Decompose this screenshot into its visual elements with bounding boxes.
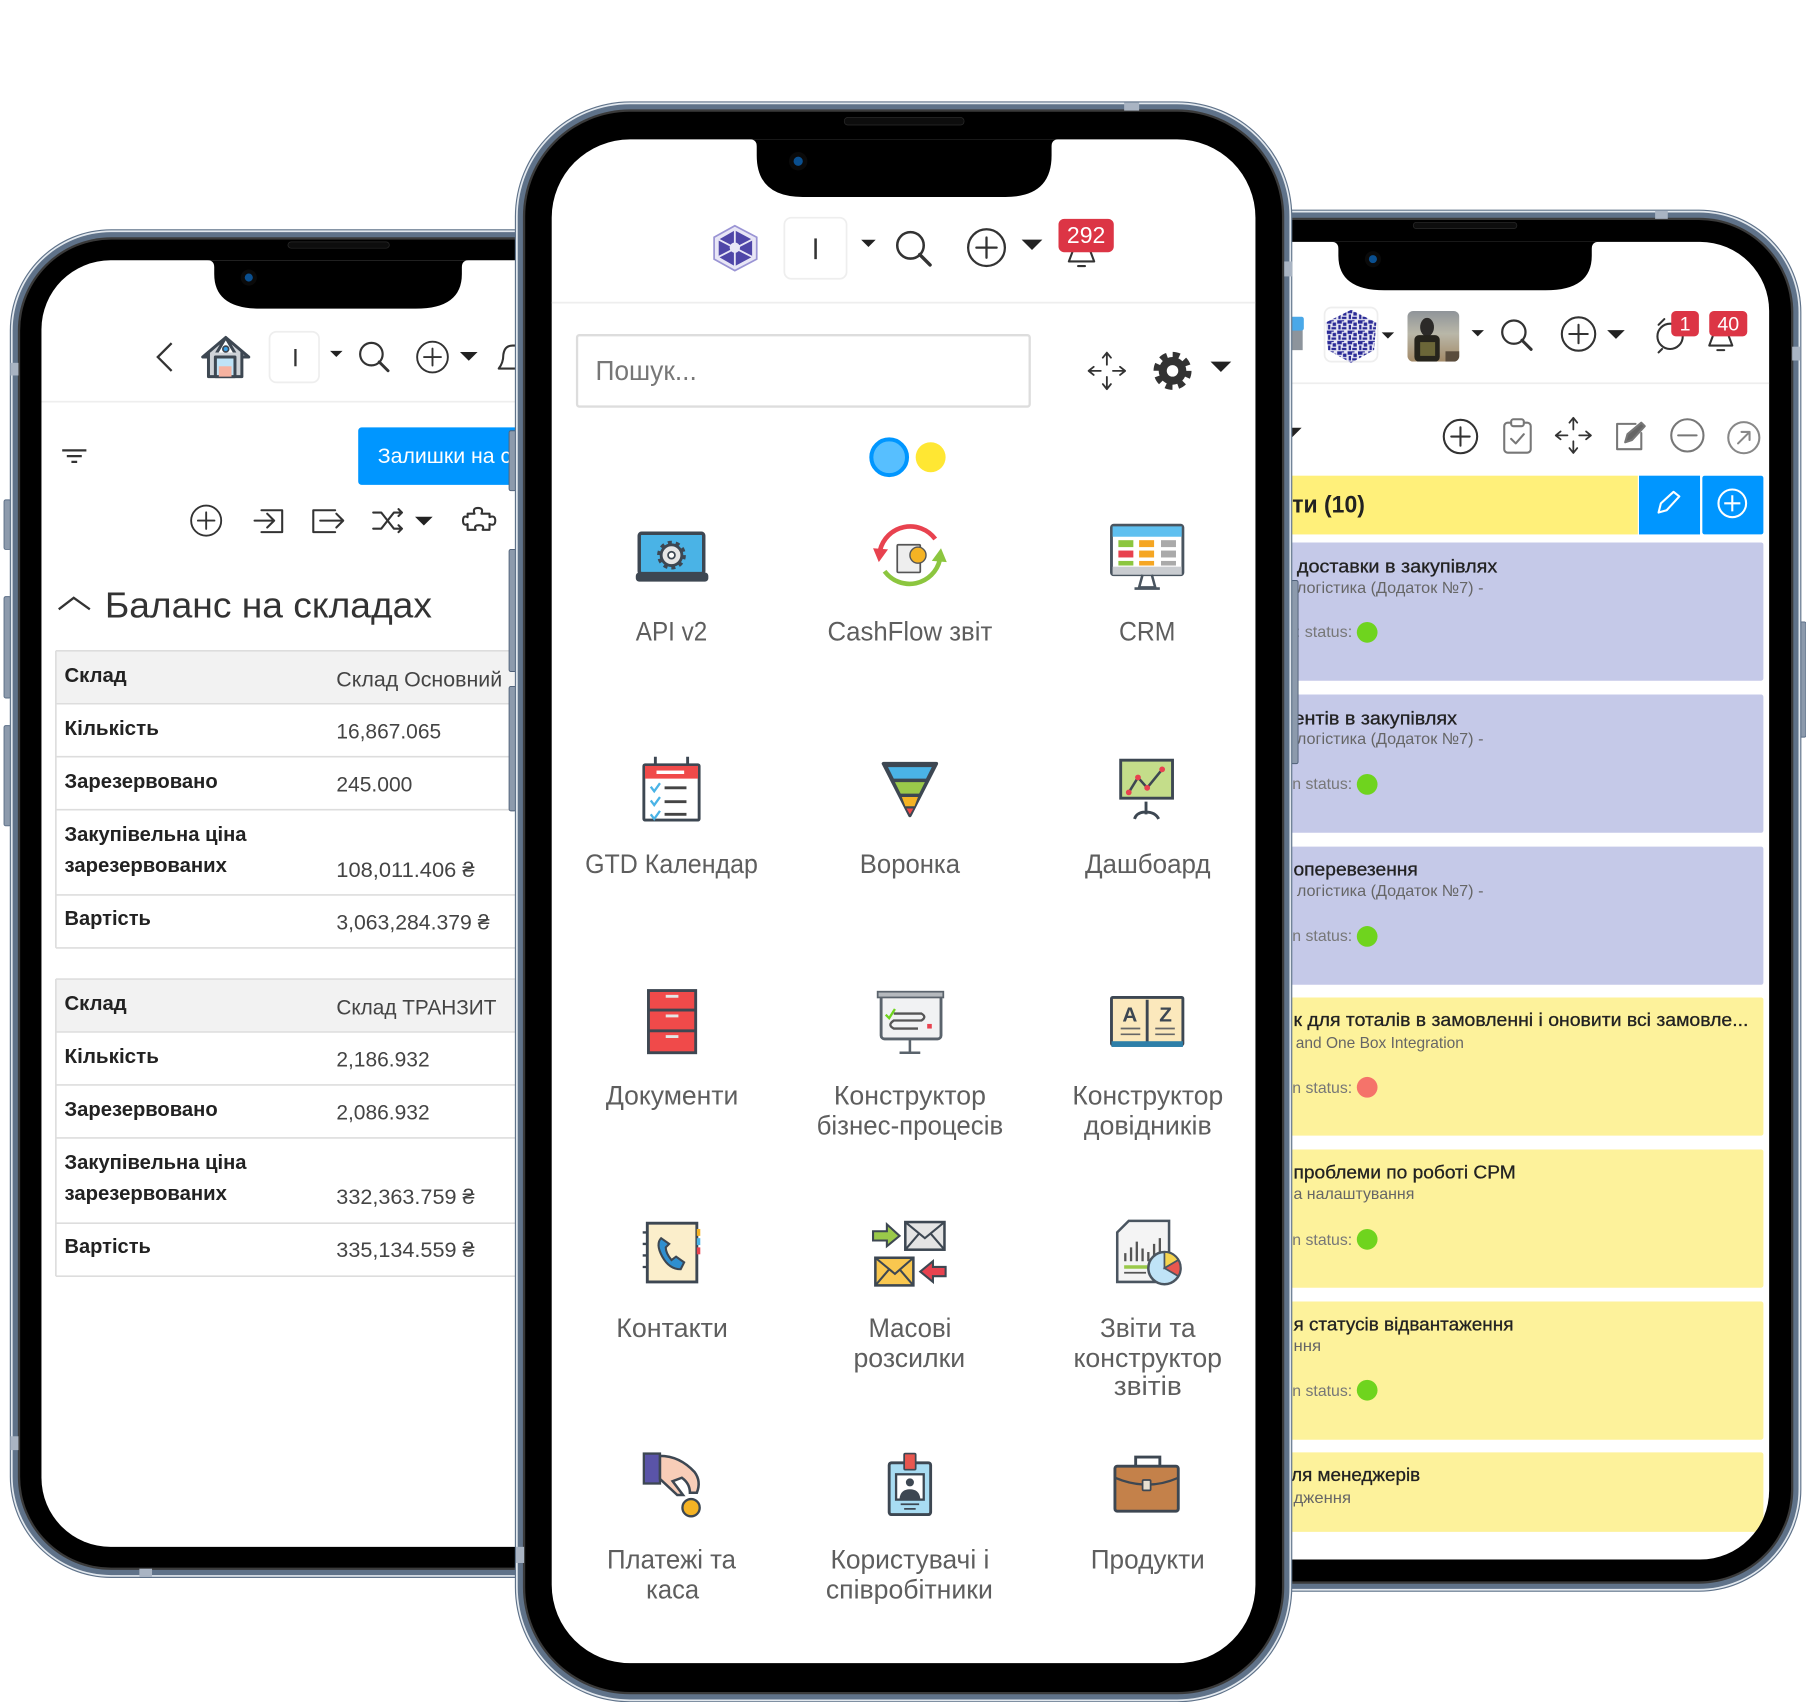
card: shipment statuses: [1267, 1302, 1763, 1440]
button: stock balance: [358, 427, 515, 485]
tile: users and employees: співробітники: [826, 1575, 993, 1605]
middle phone notch: [750, 117, 1058, 197]
icon: open: [1728, 422, 1759, 453]
tile: users and employees: [826, 1454, 993, 1605]
icon: hand and coin: [644, 1454, 700, 1516]
tile: mass mailing: Масові: [868, 1313, 951, 1343]
badge: notifications: 40: [1717, 314, 1739, 336]
icon: id badge: [889, 1454, 931, 1515]
icon: caret: [1211, 362, 1231, 372]
pagination dot active: [871, 439, 907, 475]
icon: laptop: [636, 533, 708, 582]
table: main warehouse: Закупівельна ціна: [64, 823, 247, 846]
icon: puzzle: [463, 508, 495, 530]
table: transit warehouse: 335,134.559 ₴: [336, 1238, 475, 1262]
card: transportation: n status:: [1292, 927, 1352, 945]
icon: drawers: [648, 991, 696, 1053]
icon: search: [897, 232, 930, 265]
button: edit column: [1639, 476, 1700, 534]
left phone side buttons: [4, 500, 11, 826]
badge: alarms: [1671, 311, 1699, 336]
icon: alarm: [1657, 319, 1683, 352]
table: transit warehouse: 332,363.759 ₴: [336, 1185, 475, 1209]
middle phone side buttons: [509, 431, 1298, 811]
card: CPM issues: n status:: [1292, 1231, 1352, 1249]
icon: briefcase: [1115, 1457, 1178, 1511]
icon: move: [1556, 418, 1591, 453]
tile: payments: Платежі та: [607, 1545, 736, 1575]
icon: add: [968, 229, 1005, 266]
tile: CashFlow report: [828, 526, 992, 646]
tile: reports: [1073, 1221, 1222, 1401]
table: transit warehouse: 2,186.932: [336, 1048, 430, 1072]
icon: caret: [460, 352, 478, 361]
tile: GTD calendar: GTD Календар: [585, 849, 758, 879]
table: transit warehouse: Закупівельна ціна: [64, 1151, 247, 1174]
table: transit warehouse: Вартість: [64, 1235, 151, 1258]
table: transit warehouse: Зарезервовано: [64, 1098, 218, 1121]
button: stock balance: Залишки на с: [378, 444, 512, 468]
card: delivery in purchases: [1267, 542, 1763, 681]
tile: documents: [606, 991, 738, 1111]
pagination dot: [916, 442, 946, 472]
icon: add: [1444, 420, 1477, 453]
icon: caret: [1292, 428, 1302, 437]
icon: caret: [1472, 330, 1484, 336]
right phone frame: [979, 210, 1801, 1592]
tile: products: Продукти: [1091, 1545, 1205, 1575]
icon: calendar: [644, 757, 699, 820]
tile: payments: каса: [646, 1575, 699, 1605]
tile: business process builder: бізнес-процесів: [817, 1111, 1003, 1141]
right header divider: [1292, 382, 1770, 384]
card: managers: [1267, 1452, 1763, 1532]
tile: reports: конструктор: [1073, 1343, 1222, 1373]
card: totals in orders: n status:: [1292, 1079, 1352, 1097]
avatar: user photo: [1407, 311, 1459, 362]
card: clients in purchases: [1267, 695, 1763, 833]
card: CPM issues: [1267, 1149, 1763, 1288]
table: transit warehouse: 2,086.932: [336, 1101, 430, 1125]
tile: contacts: [616, 1223, 728, 1343]
table: transit warehouse: Склад ТРАНЗИТ: [336, 996, 496, 1020]
tile: directories builder: Конструктор: [1072, 1081, 1223, 1111]
table: main warehouse: зарезервованих: [64, 854, 227, 877]
table: main warehouse: Зарезервовано: [64, 770, 218, 793]
card: delivery in purchases: логістика (Додаток №7) -: [1297, 579, 1483, 597]
card: clients in purchases: n status:: [1292, 775, 1352, 793]
tile: business process builder: [817, 992, 1003, 1141]
icon: dashboard: [1121, 760, 1173, 819]
icon: back chevron: [158, 343, 172, 371]
tile: API v2: API v2: [636, 616, 707, 646]
left header divider: [42, 401, 515, 402]
card: delivery in purchases: : status:: [1296, 623, 1352, 641]
left phone frame: [10, 229, 848, 1578]
tile: dashboard: Дашбоард: [1085, 849, 1211, 879]
tile: reports: Звіти та: [1100, 1313, 1196, 1343]
phone: app launcher: [509, 101, 1298, 1702]
phone: warehouse balance: [4, 229, 515, 1578]
tile: directories builder: довідників: [1084, 1111, 1212, 1141]
table: main warehouse: 16,867.065: [336, 719, 441, 743]
icon: move: [1089, 353, 1125, 389]
card: totals in orders: к для тоталів в замовленні і оновити всі замовле...: [1293, 1009, 1748, 1030]
table: transit warehouse: Склад: [64, 992, 127, 1015]
tile: CashFlow report: CashFlow звіт: [828, 616, 992, 646]
card: managers: дження: [1293, 1489, 1351, 1507]
card: delivery in purchases: доставки в закупівлях: [1297, 555, 1497, 576]
icon: filter: [62, 450, 86, 462]
tile: GTD calendar: [585, 757, 758, 879]
icon: bell: [498, 344, 515, 370]
middle input box: [784, 218, 847, 279]
icon: process board: [878, 992, 943, 1053]
icon: exit: [313, 510, 343, 532]
table: main warehouse: 3,063,284.379 ₴: [336, 910, 490, 934]
table: main warehouse: Кількість: [64, 717, 159, 740]
card: managers: ля менеджерів: [1291, 1464, 1420, 1485]
middle phone antenna bands: [516, 103, 1292, 1563]
table: main warehouse: 245.000: [336, 772, 412, 796]
middle phone screen content: [552, 218, 1255, 1605]
column header: [1267, 476, 1763, 534]
icon: edit: [1617, 423, 1645, 449]
table: transit warehouse: Кількість: [64, 1045, 159, 1068]
table: transit warehouse: [56, 979, 517, 1276]
table: main warehouse: [56, 651, 517, 948]
table: transit warehouse: зарезервованих: [64, 1182, 227, 1205]
icon: add: [417, 342, 448, 372]
card: CPM issues: а налаштування: [1293, 1185, 1414, 1203]
icon: caret: [330, 351, 343, 357]
card: CPM issues: проблеми по роботі СРМ: [1293, 1161, 1516, 1182]
search field: Пошук...: [595, 355, 697, 386]
right phone side button: [1800, 622, 1806, 737]
column header: ти (10): [1292, 492, 1365, 519]
left input box: [270, 332, 319, 382]
tile: CRM: CRM: [1119, 616, 1175, 646]
icon: add: [191, 506, 221, 536]
heading: Баланс на складах: [105, 585, 432, 625]
tile: mass mailing: розсилки: [853, 1343, 965, 1373]
table: main warehouse: 108,011.406 ₴: [336, 858, 475, 882]
badge: alarms: 1: [1680, 314, 1691, 336]
button: add card: [1702, 476, 1763, 534]
left phone antenna bands: [10, 363, 152, 1577]
icon: search: [360, 343, 388, 371]
phone: kanban board: [1292, 210, 1806, 1592]
tile: payments: [607, 1454, 736, 1605]
card: transportation: логістика (Додаток №7) -: [1297, 882, 1483, 900]
icon: add: [1562, 317, 1595, 351]
card: transportation: [1267, 847, 1763, 985]
tile: API v2: [636, 533, 708, 646]
right phone screen content: [1267, 308, 1769, 1532]
icon: caret: [415, 517, 433, 526]
card: shipment statuses: n status:: [1292, 1382, 1352, 1400]
icon: clipboard: [1504, 419, 1531, 453]
icon: caret: [861, 240, 876, 247]
avatar: QR cube logo: [1325, 308, 1378, 363]
icon: warehouse: [203, 337, 249, 377]
badge: notifications: [1709, 311, 1747, 336]
icon: gear: [1156, 355, 1189, 387]
table: main warehouse: Склад Основний: [336, 667, 502, 691]
card: totals in orders: and One Box Integration: [1296, 1034, 1464, 1052]
icon: dictionary: [1111, 997, 1183, 1047]
left phone screen content: [42, 331, 515, 1277]
icon: shuffle: [373, 509, 402, 532]
icon: report: [1117, 1221, 1181, 1284]
icon: dictionary: A: [1122, 1004, 1137, 1027]
left phone notch: [207, 242, 469, 309]
badge: notifications: 292: [1067, 222, 1105, 248]
tile: business process builder: Конструктор: [834, 1081, 986, 1111]
tile: mass mailing: [853, 1222, 965, 1373]
middle header divider: [552, 302, 1255, 303]
tile: dashboard: [1085, 760, 1211, 879]
icon: partial app icon: [1292, 316, 1304, 350]
tile: documents: Документи: [606, 1081, 738, 1111]
tile: users and employees: Користувачі і: [830, 1545, 989, 1575]
icon: caret: [1607, 330, 1625, 339]
icon: caret: [1022, 240, 1042, 250]
icon: search: [1502, 320, 1531, 349]
icon: enter: [255, 510, 282, 532]
card: transportation: оперевезення: [1293, 858, 1418, 879]
icon: collapse chevron: [59, 598, 90, 609]
tile: reports: звітів: [1114, 1371, 1182, 1401]
icon: caret: [1382, 332, 1394, 339]
card: shipment statuses: ння: [1293, 1337, 1321, 1355]
icon: address book: [643, 1223, 700, 1282]
icon: envelopes: [873, 1222, 946, 1285]
search field: [577, 335, 1030, 407]
tile: contacts: Контакти: [616, 1313, 728, 1343]
icon: funnel: [883, 764, 936, 815]
icon: minus: [1671, 419, 1703, 452]
right phone antenna bands: [1655, 211, 1800, 361]
logo: [714, 226, 757, 271]
table: main warehouse: Вартість: [64, 907, 151, 930]
table: main warehouse: Склад: [64, 664, 127, 687]
icon: bell: [1069, 252, 1094, 266]
tile: funnel: Воронка: [860, 849, 960, 879]
icon: cash flow: [873, 526, 947, 584]
middle phone frame: [515, 101, 1292, 1702]
tile: CRM: [1111, 525, 1183, 646]
icon: bell: [1709, 336, 1732, 350]
tile: products: [1091, 1457, 1205, 1575]
icon: monitor: [1111, 525, 1183, 589]
card: totals in orders: [1267, 997, 1763, 1136]
icon: dictionary: Z: [1159, 1004, 1172, 1027]
badge: notifications: [1058, 219, 1114, 252]
tile: directories builder: [1072, 997, 1223, 1141]
card: clients in purchases: ентів в закупівлях: [1293, 707, 1457, 728]
card: clients in purchases: логістика (Додаток №7) -: [1297, 730, 1483, 748]
card: shipment statuses: я статусів відвантаження: [1293, 1313, 1513, 1334]
tile: funnel: [860, 764, 960, 879]
right phone notch: [1331, 222, 1599, 290]
